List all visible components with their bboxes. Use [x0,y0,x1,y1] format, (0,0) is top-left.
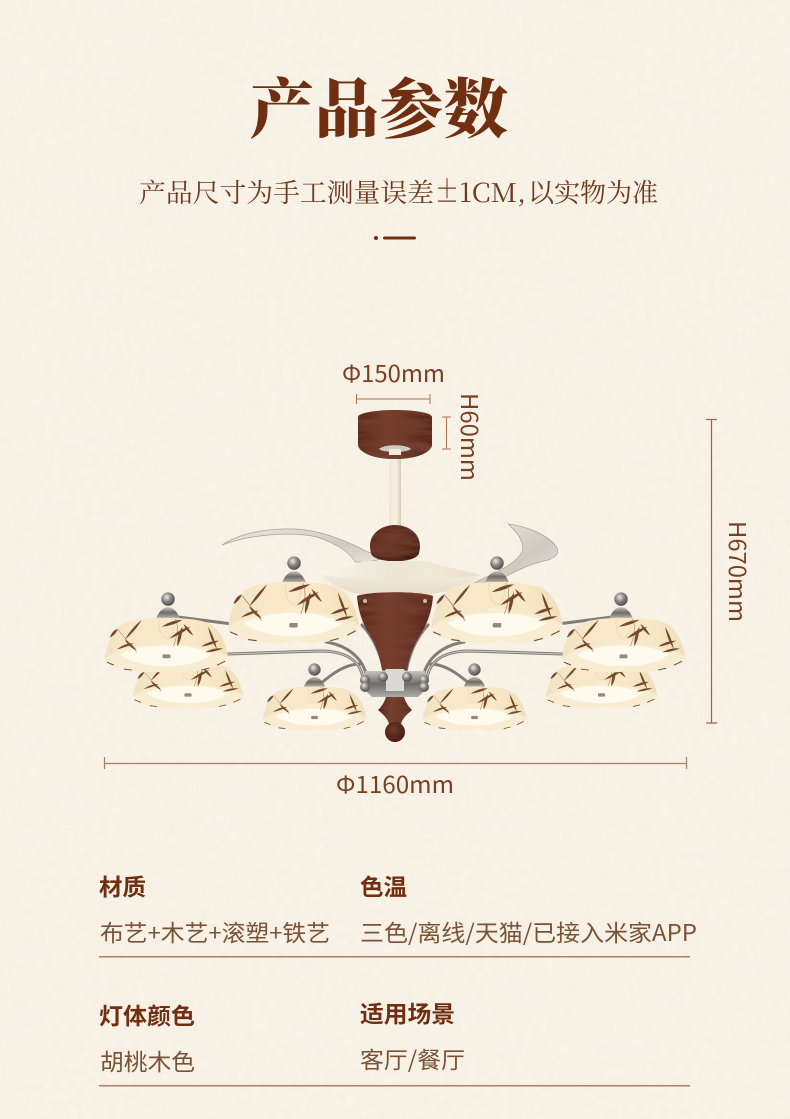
ceiling rod [389,450,401,530]
shade: lower right [423,686,526,730]
subtitle [139,167,658,211]
finial: lower right [464,663,485,687]
subtitle: 产品尺寸为手工测量误差 [139,173,434,210]
spec: colour temperature: 色温 [360,868,407,902]
dimension: total diameter [104,757,687,800]
finial: lower left [304,663,325,687]
divider [99,1085,690,1086]
finial: front right [609,592,633,618]
spec: material: 布艺+木艺+滚塑+铁艺 [100,914,330,948]
shade: back left [133,662,243,708]
divider [99,956,690,958]
spec: body colour: 胡桃木色 [100,1043,195,1077]
finial: upper left [282,556,306,582]
finial: front left [156,592,180,618]
title: 产品参数 [250,57,508,151]
dimension: canopy diameter [342,355,445,404]
wood ball [370,525,420,561]
dimension: canopy diameter: Φ150mm [342,355,445,389]
dimension: total diameter: Φ1160mm [336,766,454,800]
wooden body [357,592,433,670]
shade: front right [562,617,685,672]
dimension: total height: H670mm [722,521,756,622]
spec: colour temperature [360,868,697,948]
spec: applicable spaces: 适用场景 [360,995,455,1029]
fan disc [322,561,481,597]
finial: upper right [485,556,509,582]
shade: front left [105,617,228,672]
shade: lower left [263,686,366,730]
spec: colour temperature: 三色/离线/天猫/已接入米家APP [360,914,697,948]
subtitle: 1CM, [459,173,526,210]
fan blade right [472,524,558,584]
shade: upper left [228,581,359,643]
silver arms [178,617,612,684]
spec: body colour: 灯体颜色 [99,997,195,1031]
spec: material: 材质 [99,868,146,902]
shade: upper right [431,581,563,643]
shade: back right [546,662,657,708]
dimension: total height [706,419,756,723]
subtitle: ± [435,167,459,211]
canopy [358,410,432,459]
fan blade left [222,529,387,562]
spec: material [99,868,330,948]
title ornament: dot and dash [374,236,416,240]
lower wooden finial [378,692,412,742]
ceiling fan chandelier [105,410,685,742]
dimension: canopy height: H60mm [454,393,488,481]
spec: applicable spaces: 客厅/餐厅 [360,1041,465,1075]
spec: applicable spaces [360,995,465,1075]
chrome collar and joints [360,669,429,697]
spec: body colour [99,997,195,1077]
subtitle: 以实物为准 [528,173,658,210]
